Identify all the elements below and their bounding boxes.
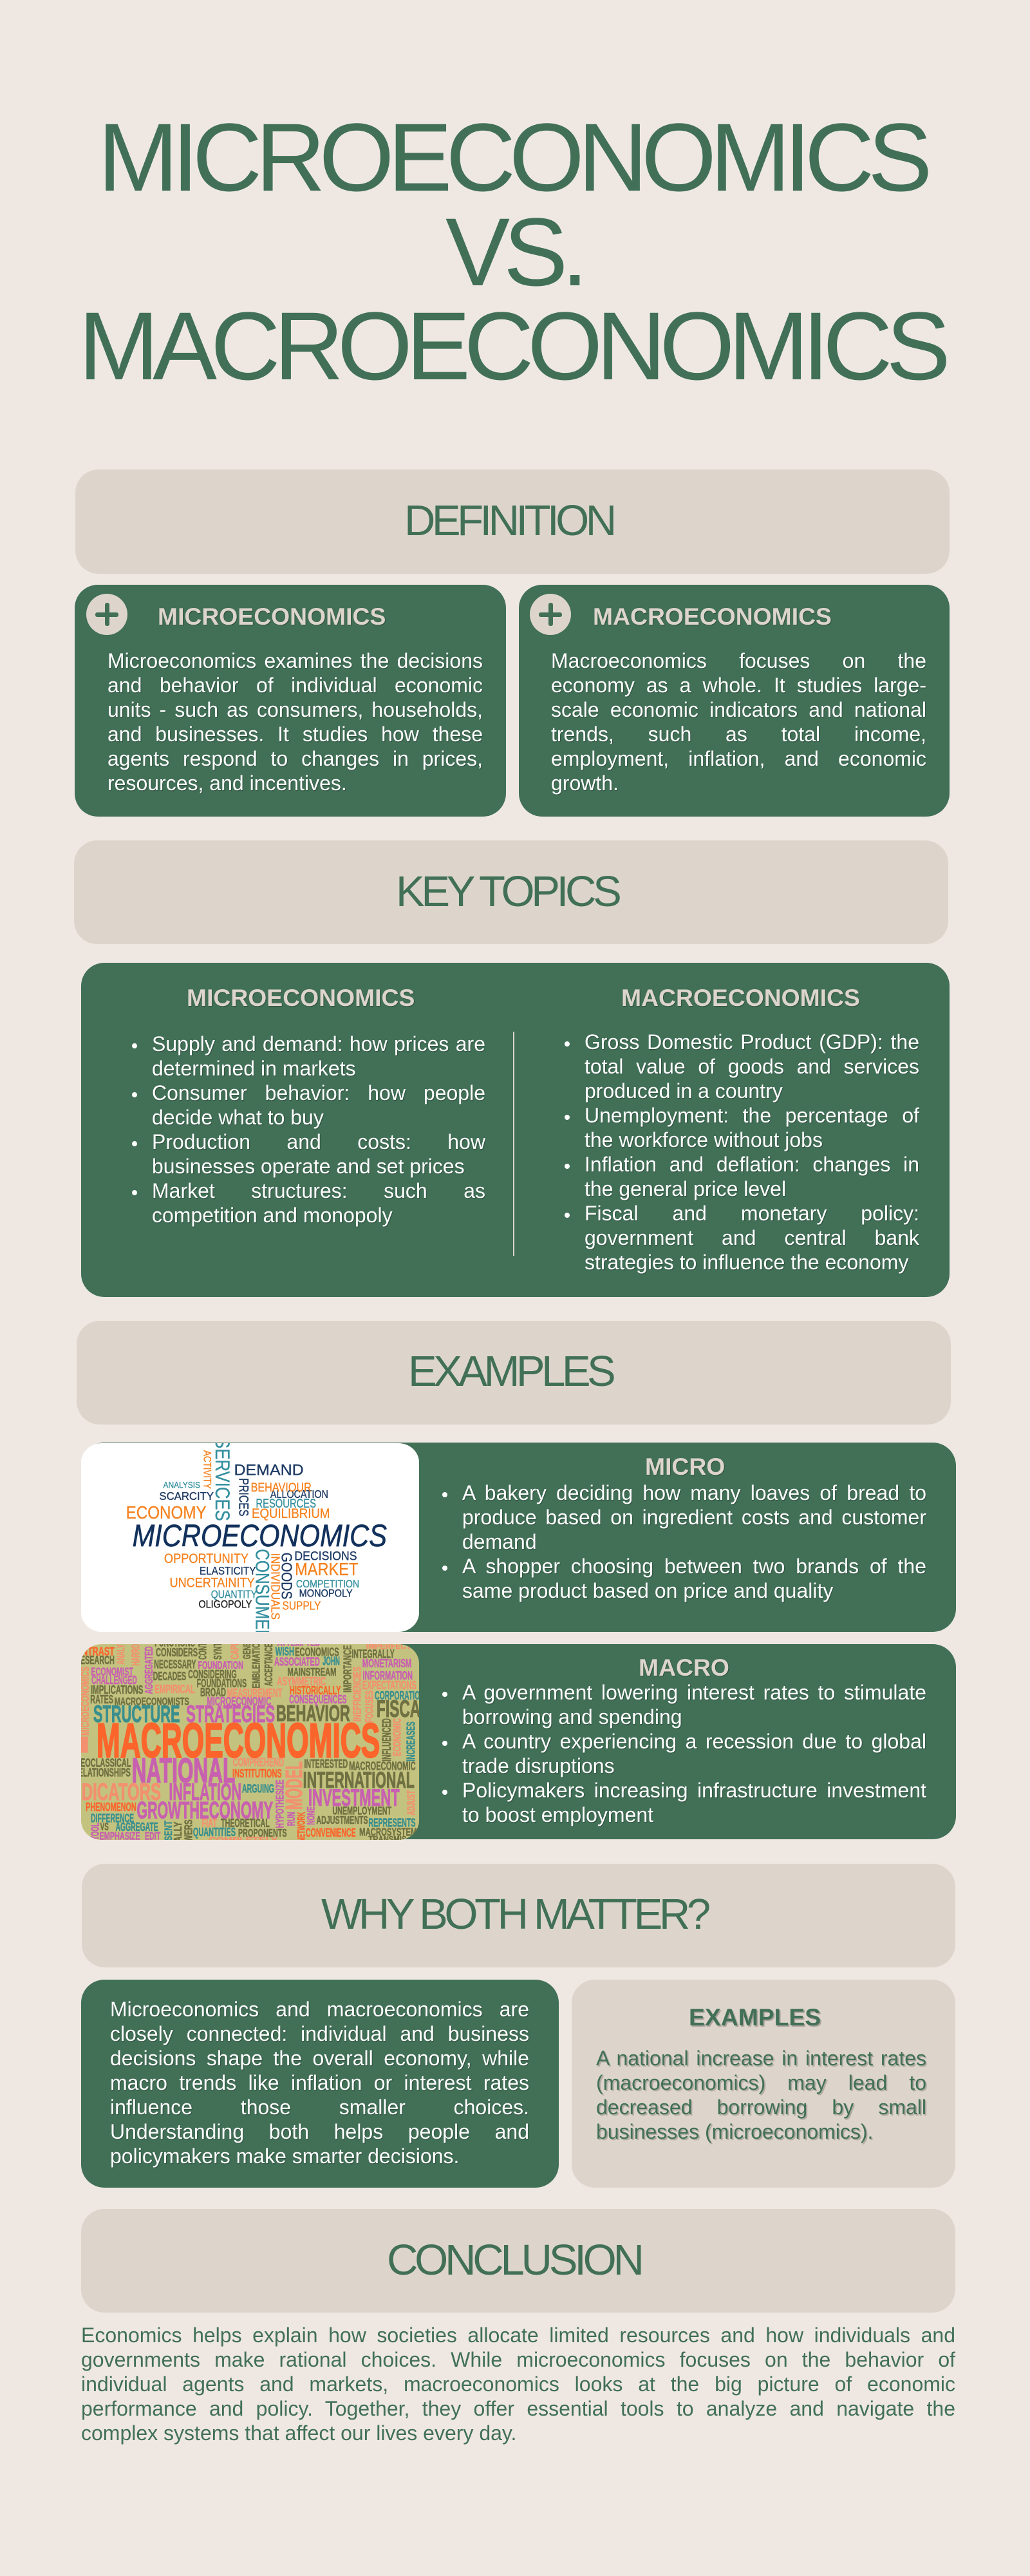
image: microeconomics word cloud: PRICES xyxy=(236,1478,251,1517)
icon: plus circle xyxy=(86,594,127,635)
magenta words: ECONOMIST xyxy=(91,1665,133,1678)
teal words: WISH xyxy=(276,1645,294,1658)
image: microeconomics word cloud: ELASTICITY xyxy=(200,1564,256,1577)
list: macro examples: A government lowering interest rates to stimulate xyxy=(462,1681,926,1704)
image: microeconomics word cloud: SUPPLY xyxy=(282,1600,321,1613)
title: MACROECONOMICS xyxy=(79,292,944,400)
olive words: ADJUSTMENTS xyxy=(316,1814,368,1826)
title: VS. xyxy=(445,198,582,306)
panel: macro examples xyxy=(81,1644,956,1839)
salmon words: ECONOMIC xyxy=(390,1718,404,1756)
panel: why both matter text xyxy=(81,1980,559,2188)
list: micro topics: decide what to buy xyxy=(152,1106,324,1129)
list: micro topics: businesses operate and set prices xyxy=(152,1155,465,1178)
paragraph: closely connected: individual and business xyxy=(110,2022,529,2045)
teal words: INCREASES xyxy=(404,1721,418,1761)
olive words: INTERESTED xyxy=(304,1757,348,1770)
image: microeconomics word cloud: ALLOCATION xyxy=(270,1488,328,1501)
olive words: IMPLICATIONS xyxy=(91,1683,143,1696)
definition text: Microeconomics examines the decisions xyxy=(108,649,483,672)
list: macro topics: Inflation and deflation: changes in xyxy=(585,1153,919,1176)
teal words: ARGUING xyxy=(242,1782,274,1795)
olive words: INFLUENCED xyxy=(380,1718,393,1761)
paragraph xyxy=(596,2047,927,2145)
image: microeconomics word cloud: MARKET xyxy=(295,1560,359,1580)
heading: definition xyxy=(75,469,950,574)
image: microeconomics word cloud: DECISIONS xyxy=(294,1549,357,1563)
heading: definition: DEFINITION xyxy=(404,497,613,545)
olive words: MAINSTREAM xyxy=(287,1666,336,1678)
list: micro examples: A bakery deciding how many loaves of bread to xyxy=(462,1481,926,1504)
image: microeconomics word cloud: UNCERTAINITY xyxy=(170,1575,255,1590)
definition text xyxy=(551,649,926,795)
list: macro examples: trade disruptions xyxy=(462,1754,615,1777)
image: microeconomics word cloud: GOODS xyxy=(278,1553,295,1599)
olive words: BROAD xyxy=(200,1686,226,1699)
magenta words: ASSOCIATED xyxy=(274,1655,320,1668)
magenta words: STRATEGIES xyxy=(186,1701,275,1728)
heading: conclusion: CONCLUSION xyxy=(387,2236,641,2284)
image: microeconomics word cloud: QUANTITY xyxy=(211,1587,258,1601)
list: macro topics: Gross Domestic Product (GDP): the xyxy=(585,1030,919,1054)
subheading: microeconomics: MICROECONOMICS xyxy=(158,603,386,630)
definition text: and businesses. It studies how these xyxy=(108,723,483,746)
salmon words: FIAT xyxy=(202,1817,217,1830)
panel: key topics xyxy=(81,963,950,1297)
list: macro examples: borrowing and spending xyxy=(462,1705,682,1728)
divider xyxy=(513,1032,514,1256)
teal words: DIFFERENCE xyxy=(91,1812,134,1824)
magenta words: GROWTH xyxy=(136,1797,200,1824)
panel: macroeconomics definition xyxy=(519,585,950,817)
magenta words: FOUNDATION xyxy=(198,1659,243,1671)
paragraph: decreased borrowing by small xyxy=(596,2096,926,2119)
image: microeconomics word cloud: SCARCITY xyxy=(159,1490,214,1502)
list: macro examples: A country experiencing a recession due to global xyxy=(462,1730,926,1753)
olive words: THEORETICAL xyxy=(221,1817,270,1830)
magenta words: TOOL xyxy=(88,1823,102,1840)
olive words: NECESSARY xyxy=(154,1658,196,1671)
olive words: VS xyxy=(100,1821,109,1833)
heading: micro: MICRO xyxy=(645,1453,725,1480)
image: microeconomics word cloud: DEMAND xyxy=(234,1462,304,1479)
image: microeconomics word cloud: ANALYSIS xyxy=(164,1481,200,1490)
teal words: QUANTITIES xyxy=(193,1826,236,1839)
subheading: macroeconomics: MACROECONOMICS xyxy=(621,984,860,1011)
heading: why both matter: WHY BOTH MATTER? xyxy=(321,1890,707,1938)
image: microeconomics word cloud xyxy=(81,1443,419,1632)
paragraph xyxy=(110,1998,529,2168)
list: micro topics: competition and monopoly xyxy=(152,1204,393,1227)
list: macro topics: strategies to influence the economy xyxy=(585,1251,908,1274)
definition text: Macroeconomics focuses on the xyxy=(551,649,926,672)
paragraph: policymakers make smarter decisions. xyxy=(110,2145,459,2168)
salmon words: FOCUSES xyxy=(362,1690,376,1723)
list: micro examples: produce based on ingredient costs and customer xyxy=(462,1506,926,1529)
paragraph: influence those smaller choices. xyxy=(110,2096,529,2119)
magenta words xyxy=(88,1638,413,1842)
paragraph: Microeconomics and macroeconomics are xyxy=(110,1998,529,2021)
heading: macro: MACRO xyxy=(639,1654,729,1681)
conclusion text: governments make rational choices. While microeconomics focuses on the behavior of xyxy=(81,2348,955,2371)
magenta words: RUN xyxy=(286,1812,297,1826)
definition text: scale economic indicators and national xyxy=(551,698,926,721)
olive words: DECADES xyxy=(153,1669,186,1683)
definition text: economy as a whole. It studies large- xyxy=(551,674,926,697)
conclusion text: Economics helps explain how societies allocate limited resources and how individuals and xyxy=(81,2324,955,2347)
panel: examples callout xyxy=(572,1980,955,2188)
list: macro topics xyxy=(565,1030,921,1274)
list: micro topics xyxy=(132,1032,486,1227)
magenta words: CHALLENGED xyxy=(91,1673,137,1687)
orange words: INSTITUTIONS xyxy=(232,1767,282,1780)
heading: conclusion xyxy=(81,2209,955,2313)
paragraph: A national increase in interest rates xyxy=(596,2047,926,2070)
magenta words: NONE xyxy=(306,1806,317,1825)
olive words: MACROECONOMISTS xyxy=(115,1695,189,1707)
magenta words: INFLATION xyxy=(169,1779,241,1806)
definition text: agents respond to changes in prices, xyxy=(108,747,483,770)
image: microeconomics word cloud: INDIVIDUALS xyxy=(269,1553,282,1620)
magenta words: NATIONAL xyxy=(132,1751,235,1790)
teal words: JOHN xyxy=(323,1654,340,1667)
list: macro topics: total value of goods and services xyxy=(585,1055,919,1078)
conclusion text xyxy=(81,2324,955,2445)
list: macro topics: Unemployment: the percentage of xyxy=(585,1104,919,1127)
list: macro examples xyxy=(442,1681,927,1827)
magenta words: HYPOTHESIZE xyxy=(273,1779,286,1828)
paragraph: decisions shape the overall economy, while xyxy=(110,2047,529,2070)
salmon words: MEASUREMENT xyxy=(227,1686,283,1700)
image: microeconomics word cloud: BEHAVIOUR xyxy=(251,1481,312,1495)
olive words: BEHAVIOR xyxy=(276,1700,350,1726)
panel: micro examples xyxy=(81,1443,956,1632)
salmon words: ASYMMETRIC xyxy=(277,1675,326,1688)
salmon words: EMPIRICAL xyxy=(154,1683,195,1696)
image: microeconomics word cloud: MONOPOLY xyxy=(299,1587,353,1599)
conclusion text: complex systems that affect our lives every day. xyxy=(81,2421,516,2445)
paragraph: macro trends like inflation or interest rates xyxy=(110,2071,529,2094)
definition text: employment, inflation, and economic xyxy=(551,747,926,770)
olive words: RATES xyxy=(90,1692,113,1706)
list: macro topics: Fiscal and monetary policy: xyxy=(585,1202,919,1225)
list: macro examples: to boost employment xyxy=(462,1803,653,1826)
olive words: CONSIDERS xyxy=(156,1646,198,1659)
subheading: macroeconomics: MACROECONOMICS xyxy=(593,603,832,630)
heading: examples xyxy=(77,1321,951,1425)
definition text xyxy=(108,649,483,795)
teal words: STRUCTURE xyxy=(93,1701,180,1728)
image: microeconomics word cloud: RESOURCES xyxy=(256,1497,316,1511)
teal words: AGGREGATE xyxy=(116,1821,158,1833)
list: micro topics: Production and costs: how xyxy=(152,1130,485,1153)
icon: plus circle xyxy=(530,594,571,635)
list: micro topics: Market structures: such as xyxy=(152,1179,485,1202)
list: micro examples: demand xyxy=(462,1530,537,1553)
list: macro topics: produced in a country xyxy=(585,1079,783,1103)
definition text: and behavior of individual economic xyxy=(108,674,483,697)
paragraph: businesses (microeconomics). xyxy=(596,2120,873,2143)
conclusion text: individual agents and markets, macroeconomics looks at the big picture of economic xyxy=(81,2372,955,2396)
salmon words: COMPREHEND xyxy=(233,1756,284,1768)
list: micro examples: A shopper choosing between two brands of the xyxy=(462,1555,926,1578)
salmon words xyxy=(66,1641,418,1845)
magenta words: ECONOMY xyxy=(200,1797,273,1824)
salmon words: MODEL xyxy=(282,1761,307,1810)
list: micro topics: Consumer behavior: how people xyxy=(152,1081,485,1104)
title: MICROECONOMICS xyxy=(98,103,926,211)
heading: examples: EXAMPLES xyxy=(408,1347,612,1396)
list: micro examples: same product based on price and quality xyxy=(462,1579,833,1602)
image: microeconomics word cloud: ECONOMY xyxy=(126,1502,207,1522)
image: microeconomics word cloud: OLIGOPOLY xyxy=(198,1598,252,1611)
orange words xyxy=(70,1645,380,1842)
list: micro topics: determined in markets xyxy=(152,1057,356,1080)
list: macro topics: the general price level xyxy=(585,1177,786,1200)
heading: key topics xyxy=(74,840,948,944)
orange words: CONVENIENCE xyxy=(306,1826,356,1839)
definition text: resources, and incentives. xyxy=(108,772,347,795)
olive words xyxy=(81,1644,419,1840)
subheading: microeconomics: MICROECONOMICS xyxy=(187,984,415,1011)
paragraph: Understanding both helps people and xyxy=(110,2120,529,2143)
paragraph: (macroeconomics) may lead to xyxy=(596,2071,926,2094)
magenta words: CONSEQUENCES xyxy=(289,1692,347,1706)
teal words xyxy=(91,1645,425,1841)
image: microeconomics word cloud: ACTIVITY xyxy=(201,1450,212,1489)
list: macro topics: the workforce without jobs xyxy=(585,1128,823,1151)
image: macroeconomics word cloud xyxy=(81,1644,419,1840)
heading: why both matter xyxy=(82,1864,955,1967)
list: micro examples xyxy=(442,1481,927,1603)
olive words: ECONOMICS xyxy=(295,1645,339,1658)
title xyxy=(79,103,946,400)
orange words: HISTORICALLY xyxy=(290,1683,341,1697)
orange words: PHENOMENON xyxy=(86,1800,136,1814)
salmon words: ADJUST xyxy=(404,1790,418,1815)
subheading: examples: EXAMPLES xyxy=(689,2003,821,2031)
olive words: PROPONENTS xyxy=(238,1827,287,1839)
magenta words: MICROECONOMIC xyxy=(207,1695,271,1708)
image: microeconomics word cloud: EQUILIBRIUM xyxy=(252,1506,330,1521)
definition text: growth. xyxy=(551,772,619,795)
definition text: units - such as consumers, households, xyxy=(108,698,483,721)
list: micro topics: Supply and demand: how prices are xyxy=(152,1032,485,1056)
heading: key topics: KEY TOPICS xyxy=(396,867,618,916)
conclusion text: performance and policy. Together, they offer essential tools to analyze and navigate the xyxy=(81,2397,955,2420)
image: microeconomics word cloud: COMPETITION xyxy=(296,1578,359,1590)
list: macro examples: Policymakers increasing infrastructure investment xyxy=(462,1779,926,1802)
olive words: CONSIDERING xyxy=(188,1667,237,1681)
olive words: FOUNDATIONS xyxy=(197,1676,247,1690)
panel: microeconomics definition xyxy=(75,585,506,817)
list: macro topics: government and central bank xyxy=(585,1226,919,1249)
image: microeconomics word cloud: OPPORTUNITY xyxy=(164,1551,248,1566)
definition text: trends, such as total income, xyxy=(551,723,926,746)
